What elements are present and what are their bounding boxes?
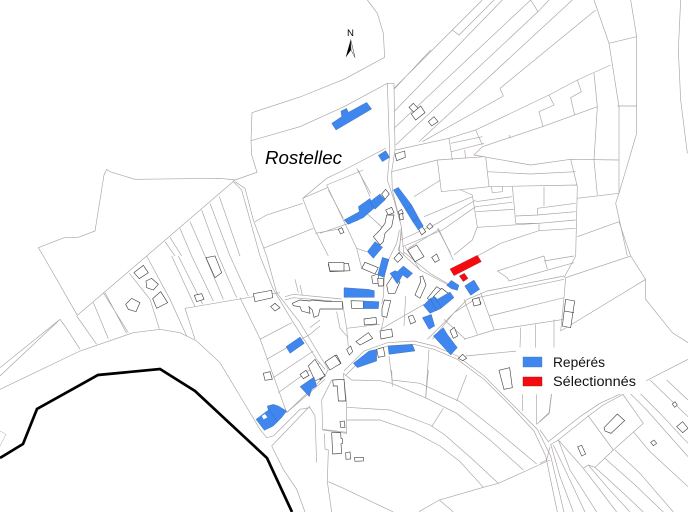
legend: Repérés bbox=[553, 355, 605, 370]
red buildings: sélectionnés bbox=[450, 255, 481, 282]
unselected building outlines bbox=[126, 103, 688, 461]
north arrow bbox=[346, 28, 355, 58]
legend bbox=[516, 348, 646, 394]
village lanes bbox=[320, 170, 453, 304]
south-east strip parcels bbox=[540, 380, 688, 512]
legend: Sélectionnés bbox=[553, 374, 636, 389]
north arrow: N bbox=[347, 28, 354, 39]
blue buildings: repérés bbox=[256, 102, 480, 430]
lower fields bbox=[322, 370, 550, 512]
commune boundary bbox=[0, 369, 292, 512]
place name: Rostellec bbox=[265, 147, 343, 168]
